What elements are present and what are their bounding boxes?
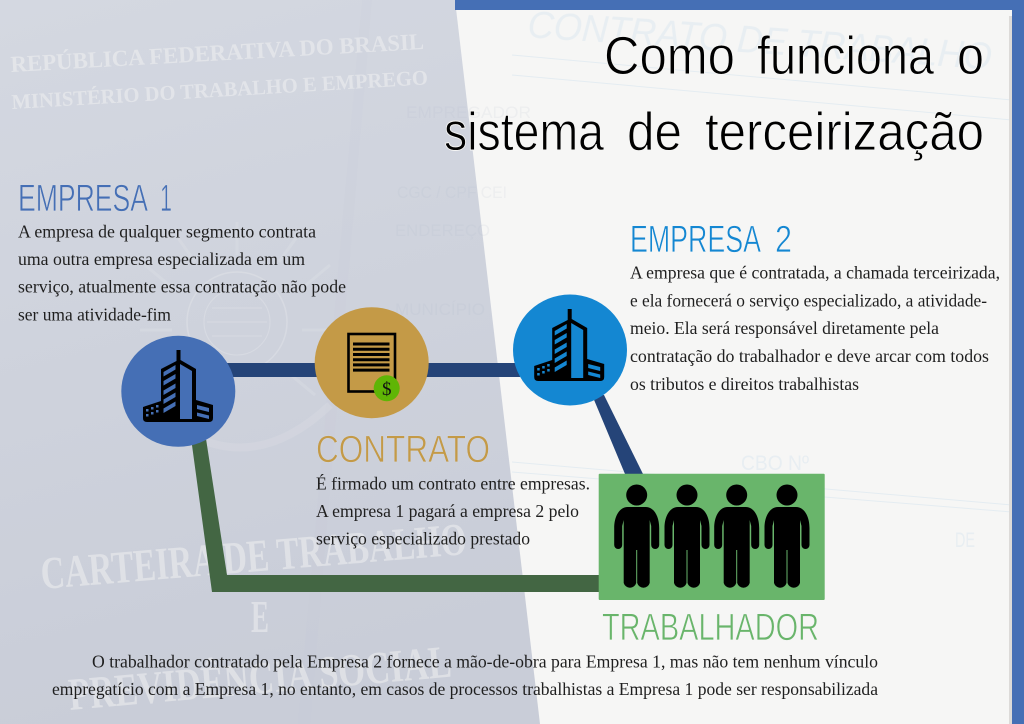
heading: empresa 1: 1 <box>160 178 172 220</box>
heading: empresa 2: EMPRESA <box>630 219 761 261</box>
text: contrato description <box>316 473 590 549</box>
background: work card cover <box>0 0 540 724</box>
watermark: cover text: MINISTÉRIO DO TRABALHO E EMPREGO <box>11 65 429 114</box>
background: paper page: DE <box>955 529 975 552</box>
icon: person 4 <box>764 484 810 588</box>
title: funciona <box>757 26 935 86</box>
icon: empresa 1 building <box>121 336 235 447</box>
panel: trabalhador icon <box>599 474 825 600</box>
text: contrato description: É firmado um contrato entre empresas. <box>316 473 590 494</box>
icon: contract <box>315 307 429 418</box>
text: empresa 2 description: contratação do trabalhador e deve arcar com todos <box>630 346 989 366</box>
connector: empresa 2 to trabalhador <box>592 395 643 474</box>
watermark: cover text: CARTEIRA DE TRABALHO <box>39 513 468 599</box>
title: Como <box>604 26 735 86</box>
text: empresa 1 description: A empresa de qualquer segmento contrata <box>18 222 316 242</box>
text: conclusion: empregatício com a Empresa 1, no entanto, em casos de processos trabalhistas a Empresa 1 pode ser responsabilizada <box>52 679 878 699</box>
watermark: cover text: REPÚBLICA FEDERATIVA DO BRASIL <box>10 29 425 77</box>
heading: empresa 2: 2 <box>775 219 792 261</box>
heading: empresa 1: EMPRESA <box>18 178 148 220</box>
title: o <box>957 26 984 86</box>
text: contrato description: A empresa 1 pagará a empresa 2 pelo <box>316 501 579 521</box>
coat of arms watermark <box>140 222 335 448</box>
text: contrato description: serviço especializado prestado <box>316 529 530 549</box>
text: empresa 2 description <box>630 262 1000 394</box>
blue frame <box>455 0 1024 724</box>
text: empresa 2 description: os tributos e direitos trabalhistas <box>630 374 859 394</box>
title: de <box>627 102 682 162</box>
icon: contract: $ <box>382 379 391 400</box>
connector: empresa 1 to contrato to empresa 2 <box>225 363 520 377</box>
text: empresa 1 description: ser uma atividade-fim <box>18 304 171 324</box>
title: sistema <box>444 102 605 162</box>
background: work card cover: MUNICÍPIO <box>395 300 485 319</box>
connector: empresa 1 to trabalhador <box>191 440 600 592</box>
text: empresa 2 description: e ela fornecerá o serviço especializado, a atividade- <box>630 290 987 310</box>
title <box>444 26 984 162</box>
background: paper page: CBO Nº <box>741 452 809 475</box>
text: empresa 1 description <box>18 222 346 324</box>
icon: person 3 <box>714 484 759 588</box>
background: work card cover: ENDEREÇO <box>395 221 490 240</box>
watermark: cover text: E <box>251 591 269 642</box>
watermark: cover text <box>10 29 468 720</box>
icon: empresa 2 building <box>513 294 627 406</box>
text: empresa 2 description: A empresa que é contratada, a chamada terceirizada, <box>630 262 1000 282</box>
background: paper page: CONTRATO DE TRABALHO <box>526 4 993 78</box>
text: conclusion: O trabalhador contratado pela Empresa 2 fornece a mão-de-obra para Empresa 1, mas não tem nenhum vínculo <box>92 652 878 672</box>
heading: trabalhador: TRABALHADOR <box>602 607 819 649</box>
title: terceirização <box>705 102 984 162</box>
text: conclusion <box>52 652 878 699</box>
text: empresa 2 description: meio. Ela será responsável diretamente pela <box>630 318 939 338</box>
watermark: cover text: PREVIDÊNCIA SOCIAL <box>66 636 453 720</box>
text: empresa 1 description: uma outra empresa especializada em um <box>18 249 305 269</box>
background: work card cover: EMPREGADOR <box>406 103 531 122</box>
icon: person 1 <box>614 484 659 588</box>
text: empresa 1 description: serviço, atualmente essa contratação não pode <box>18 277 346 297</box>
background: work card cover: CGC / CPF CEI <box>397 183 507 202</box>
icon: person 2 <box>664 484 710 588</box>
heading: contrato: CONTRATO <box>316 429 490 471</box>
